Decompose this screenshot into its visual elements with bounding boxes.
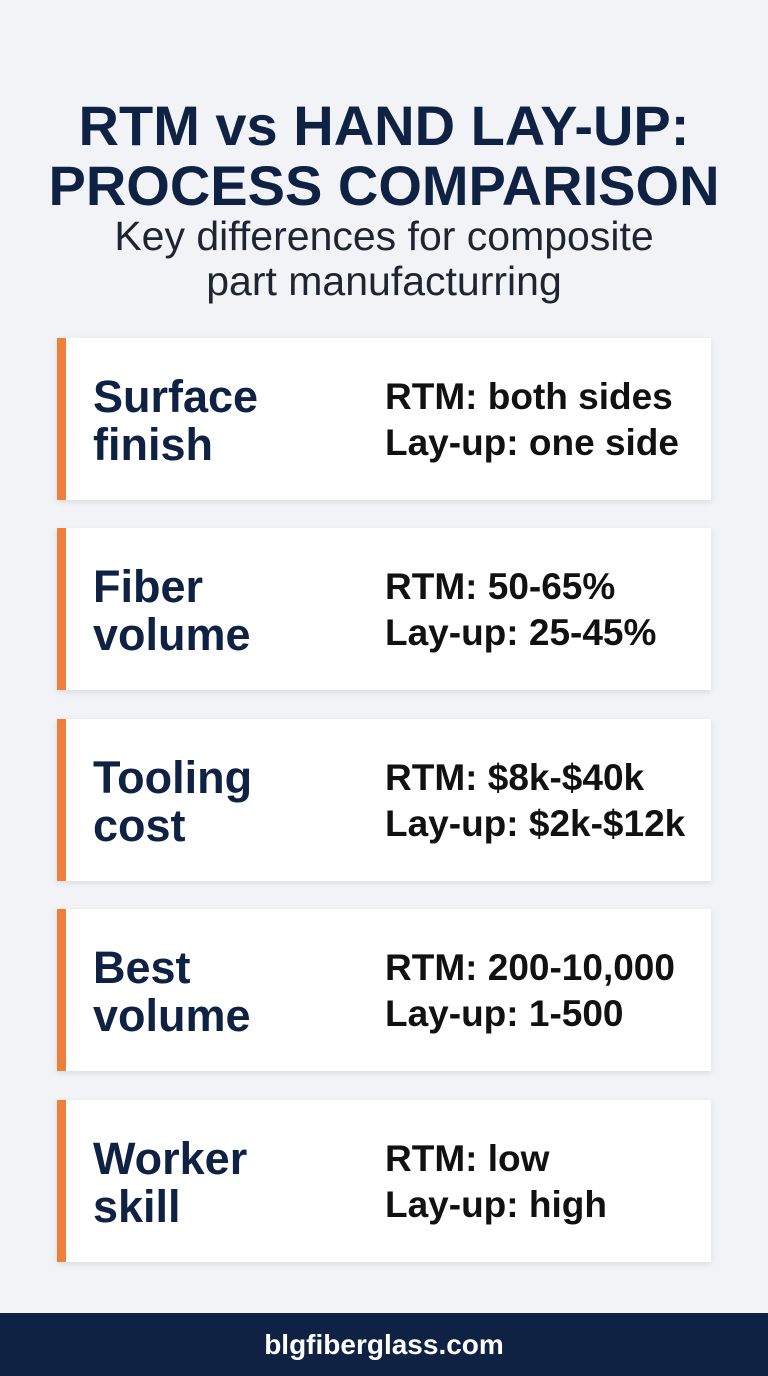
- title: RTM vs HAND LAY-UP:: [79, 94, 689, 157]
- label: tooling cost: cost: [93, 800, 186, 851]
- label: worker skill: Worker: [93, 1133, 247, 1184]
- panel: surface finish: [57, 338, 711, 500]
- values: fiber volume: RTM: 50-65%: [385, 566, 615, 607]
- panel: tooling cost: [57, 719, 711, 881]
- panel: fiber volume: [57, 528, 711, 690]
- label: fiber volume: [93, 561, 251, 660]
- footer: [0, 1313, 768, 1376]
- values: surface finish: Lay-up: one side: [385, 422, 679, 463]
- values: tooling cost: RTM: $8k-$40k: [385, 757, 644, 798]
- values: best volume: [385, 947, 675, 1034]
- label: surface finish: Surface: [93, 371, 258, 422]
- values: best volume: RTM: 200-10,000: [385, 947, 675, 988]
- values: tooling cost: Lay-up: $2k-$12k: [385, 803, 685, 844]
- values: surface finish: RTM: both sides: [385, 376, 673, 417]
- label: tooling cost: Tooling: [93, 752, 252, 803]
- values: worker skill: RTM: low: [385, 1138, 549, 1179]
- title: [48, 94, 720, 217]
- label: surface finish: finish: [93, 419, 213, 470]
- label: tooling cost: [93, 752, 252, 851]
- subtitle: Key differences for composite: [114, 213, 654, 259]
- label: fiber volume: Fiber: [93, 561, 203, 612]
- values: best volume: Lay-up: 1-500: [385, 993, 624, 1034]
- subtitle: [114, 213, 654, 304]
- label: surface finish: [93, 371, 258, 470]
- panel: worker skill: [57, 1100, 711, 1262]
- label: best volume: [93, 942, 251, 1041]
- values: tooling cost: [385, 757, 686, 844]
- label: best volume: Best: [93, 942, 191, 993]
- values: fiber volume: Lay-up: 25-45%: [385, 612, 656, 653]
- panel: best volume: [57, 909, 711, 1071]
- label: worker skill: [93, 1133, 247, 1232]
- title: PROCESS COMPARISON: [48, 154, 720, 217]
- subtitle: part manufacturring: [206, 258, 562, 304]
- label: worker skill: skill: [93, 1181, 181, 1232]
- values: worker skill: Lay-up: high: [385, 1184, 607, 1225]
- values: surface finish: [385, 376, 679, 463]
- values: fiber volume: [385, 566, 656, 653]
- label: best volume: volume: [93, 990, 251, 1041]
- label: fiber volume: volume: [93, 609, 251, 660]
- footer: blgfiberglass.com: [264, 1329, 504, 1360]
- values: worker skill: [385, 1138, 607, 1225]
